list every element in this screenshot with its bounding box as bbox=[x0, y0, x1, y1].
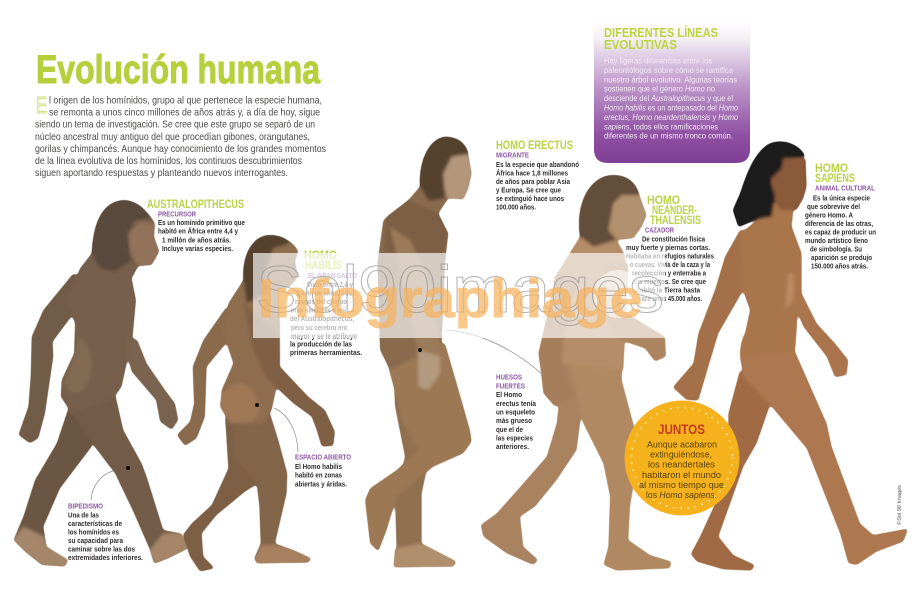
caption: Homo erectus bbox=[496, 140, 579, 212]
description: África hace 1,8 millones bbox=[496, 168, 568, 178]
callout text: su capacidad para bbox=[68, 538, 123, 545]
species name: HOMO bbox=[647, 195, 680, 207]
leader line bbox=[445, 330, 542, 374]
callout text bbox=[496, 374, 536, 451]
callout text: FUERTES bbox=[496, 384, 525, 390]
intro text block: de la línea evolutiva de los homínidos, los continuos descubrimientos bbox=[35, 156, 302, 167]
description bbox=[805, 196, 876, 270]
species name bbox=[304, 250, 342, 272]
callout text: Aunque acabaron bbox=[647, 440, 717, 450]
description: 1 millón de años atrás. bbox=[162, 237, 231, 244]
callout text: Una de las bbox=[68, 512, 99, 520]
species name: HOMO bbox=[815, 163, 848, 175]
description: Es la especie que abandonó bbox=[496, 162, 579, 169]
description: es capaz de producir un bbox=[805, 230, 876, 236]
callout text: erectus tenía bbox=[496, 401, 536, 408]
figure: Homo sapiens bbox=[673, 141, 908, 571]
species name: HABILIS bbox=[305, 260, 342, 272]
panel body text: sostienen que el género Homo no bbox=[604, 85, 715, 94]
callout text: El Homo bbox=[496, 392, 522, 399]
description: género Homo. A bbox=[805, 212, 853, 220]
description: mayor y se le atribuye bbox=[291, 334, 357, 341]
callout text: anteriores. bbox=[496, 444, 529, 451]
callout text: habitó en zonas bbox=[295, 473, 342, 480]
image credit: ©Sol 90 Images bbox=[896, 484, 903, 525]
callout text: los homínidos es bbox=[68, 530, 119, 536]
description: Incluye varias especies. bbox=[162, 246, 233, 253]
subtitle: EL GRAN SALTO bbox=[308, 273, 357, 280]
callout text: extinguiéndose, bbox=[650, 450, 712, 460]
description: habitó en África entre 4,4 y bbox=[158, 227, 238, 236]
subtitle: ANIMAL CULTURAL bbox=[815, 186, 876, 192]
callout text: más grueso bbox=[496, 418, 532, 425]
species name: THALENSIS bbox=[650, 215, 701, 227]
description bbox=[158, 220, 245, 253]
description: 100.000 años. bbox=[496, 204, 536, 212]
description: muy fuerte y piernas cortas. bbox=[626, 245, 710, 252]
panel body text: nuestro árbol evolutivo. Algunas teorías bbox=[604, 75, 737, 84]
intro text block: gorilas y chimpancés. Aunque hay conocimiento de los grandes momentos bbox=[35, 144, 326, 155]
species name: AUSTRALOPITHECUS bbox=[147, 199, 244, 211]
callout text bbox=[639, 440, 724, 501]
callout: bipedismo bbox=[68, 466, 143, 562]
intro text block bbox=[35, 92, 326, 179]
subtitle: CAZADOR bbox=[645, 228, 674, 234]
description: que sobrevive del bbox=[807, 204, 860, 211]
panel heading bbox=[604, 25, 718, 52]
description: hace unos 45.000 años. bbox=[638, 296, 702, 303]
figure: Homo erectus bbox=[365, 137, 472, 567]
description: Vivió entre 2,4 y bbox=[307, 282, 353, 289]
marker dot bbox=[418, 348, 422, 352]
description: eran similares a los bbox=[291, 308, 346, 314]
species name bbox=[647, 195, 701, 227]
description: habitó la Tierra hasta bbox=[636, 288, 700, 294]
species name: NEANDER- bbox=[652, 205, 697, 217]
description: Es la única especie bbox=[813, 196, 870, 202]
drop cap: E bbox=[36, 92, 47, 118]
species name: HOMO bbox=[304, 250, 337, 262]
description: pero su cerebro era bbox=[291, 325, 347, 332]
intro text block: se remonta a unos cinco millones de años atrás y, a día de hoy, sigue bbox=[49, 108, 320, 119]
species name: SAPIENS bbox=[815, 173, 855, 185]
description: sus muertos. Se cree que bbox=[632, 279, 706, 286]
subtitle: MIGRANTE bbox=[496, 152, 529, 160]
panel body text: erectus, Homo neardenthalensis y Homo bbox=[604, 113, 738, 122]
intro text block: núcleo ancestral muy antiguo del que procedían gibones, orangutanes, bbox=[35, 132, 310, 143]
description: rasgos del cuerpo bbox=[295, 299, 347, 306]
callout text: al mismo tiempo que bbox=[639, 480, 724, 491]
species name: HOMO ERECTUS bbox=[496, 140, 573, 152]
caption: Australopithecus bbox=[147, 199, 245, 253]
description: Es un homínido primitivo que bbox=[158, 220, 245, 227]
marker dot bbox=[126, 466, 130, 470]
callout text: un esqueleto bbox=[496, 410, 535, 417]
caption: Homo habilis bbox=[290, 250, 362, 357]
callout: juntos bbox=[624, 400, 740, 516]
description: De constitución física bbox=[642, 236, 705, 244]
callout text: los neandertales bbox=[648, 460, 715, 470]
callout text: las especies bbox=[496, 436, 533, 442]
callout text bbox=[295, 454, 351, 488]
panel heading: DIFERENTES LÍNEAS bbox=[604, 25, 718, 40]
callout text: caminar sobre las dos bbox=[68, 546, 135, 554]
panel body text: Homo habilis es un antepasado del Homo bbox=[604, 104, 738, 112]
description: de años para poblar Asia bbox=[496, 179, 570, 186]
callout text: ESPACIO ABIERTO bbox=[295, 454, 351, 462]
intro text block: siguen aportando respuestas y planteando nuevos interrogantes. bbox=[35, 168, 288, 179]
panel body text: Hay ligeras diferencias entre los bbox=[604, 56, 712, 66]
figure: Homo habilis bbox=[177, 235, 335, 572]
description: primeras herramientas. bbox=[290, 350, 362, 357]
panel body text: paleontólogos sobre cómo se ramifica bbox=[604, 66, 733, 75]
figure: Homo neanderthalensis bbox=[481, 175, 672, 571]
callout text: El Homo habilis bbox=[295, 464, 342, 471]
callout text: características de bbox=[68, 521, 122, 528]
callout: huesos fuertes bbox=[418, 330, 542, 451]
panel: diferentes líneas evolutivas bbox=[594, 22, 750, 163]
callout text: los Homo sapiens. bbox=[646, 490, 717, 501]
caption: Homo sapiens bbox=[805, 163, 876, 270]
panel body text: diferentes de un mismo tronco común. bbox=[604, 132, 733, 140]
figure: Australopithecus bbox=[13, 200, 188, 567]
callout text: BIPEDISMO bbox=[68, 504, 103, 510]
callout text: que el de bbox=[496, 427, 523, 434]
watermark: Infographiage bbox=[258, 269, 642, 329]
description: de simbología. Su bbox=[810, 246, 862, 254]
description: recolección y enterraba a bbox=[632, 270, 706, 278]
leader line bbox=[274, 408, 298, 452]
callout: espacio abierto bbox=[255, 403, 351, 488]
description bbox=[496, 162, 579, 212]
description: mundo artístico lleno bbox=[805, 238, 868, 245]
description: diferencia de las otras, bbox=[805, 221, 873, 228]
description: 1,4 m. de años. Sus bbox=[296, 290, 352, 298]
description: o cuevas. Vivía de la caza y la bbox=[630, 262, 710, 269]
title: Evolución humana bbox=[36, 48, 321, 92]
intro text block: l origen de los homínidos, grupo al que pertenece la especie humana, bbox=[49, 96, 322, 106]
callout text: habitaron el mundo bbox=[642, 470, 721, 481]
panel body text: desciende del Australopithecus y que el bbox=[604, 94, 733, 103]
watermark: Sol90images bbox=[256, 252, 664, 326]
callout text: extremidades inferiores. bbox=[68, 555, 143, 562]
description: aparición se produjo bbox=[811, 255, 872, 262]
description: del Australopithecus, bbox=[290, 316, 354, 323]
description: 150.000 años atrás. bbox=[811, 264, 868, 270]
callout text bbox=[68, 504, 143, 562]
description: y Europa. Se cree que bbox=[496, 188, 561, 194]
subtitle: PRECURSOR bbox=[158, 212, 196, 218]
marker dot bbox=[255, 403, 259, 407]
description bbox=[626, 236, 714, 303]
callout heading: JUNTOS bbox=[658, 422, 705, 437]
callout text: HUESOS bbox=[496, 374, 522, 382]
description bbox=[290, 282, 362, 357]
panel body text: sapiens, todos ellos ramificaciones bbox=[604, 122, 718, 131]
description: se extinguió hace unos bbox=[496, 196, 564, 203]
species name bbox=[815, 163, 855, 185]
leader line bbox=[91, 471, 113, 500]
intro text block: siendo un tema de investigación. Se cree que este grupo se separó de un bbox=[35, 120, 315, 131]
description: Habitaba en refugios naturales bbox=[626, 254, 714, 260]
callout text: abiertas y áridas. bbox=[295, 481, 347, 488]
caption: Homo neanderthalensis bbox=[626, 195, 714, 303]
panel body text bbox=[604, 56, 738, 140]
panel heading: EVOLUTIVAS bbox=[604, 38, 677, 52]
description: la producción de las bbox=[290, 342, 352, 348]
